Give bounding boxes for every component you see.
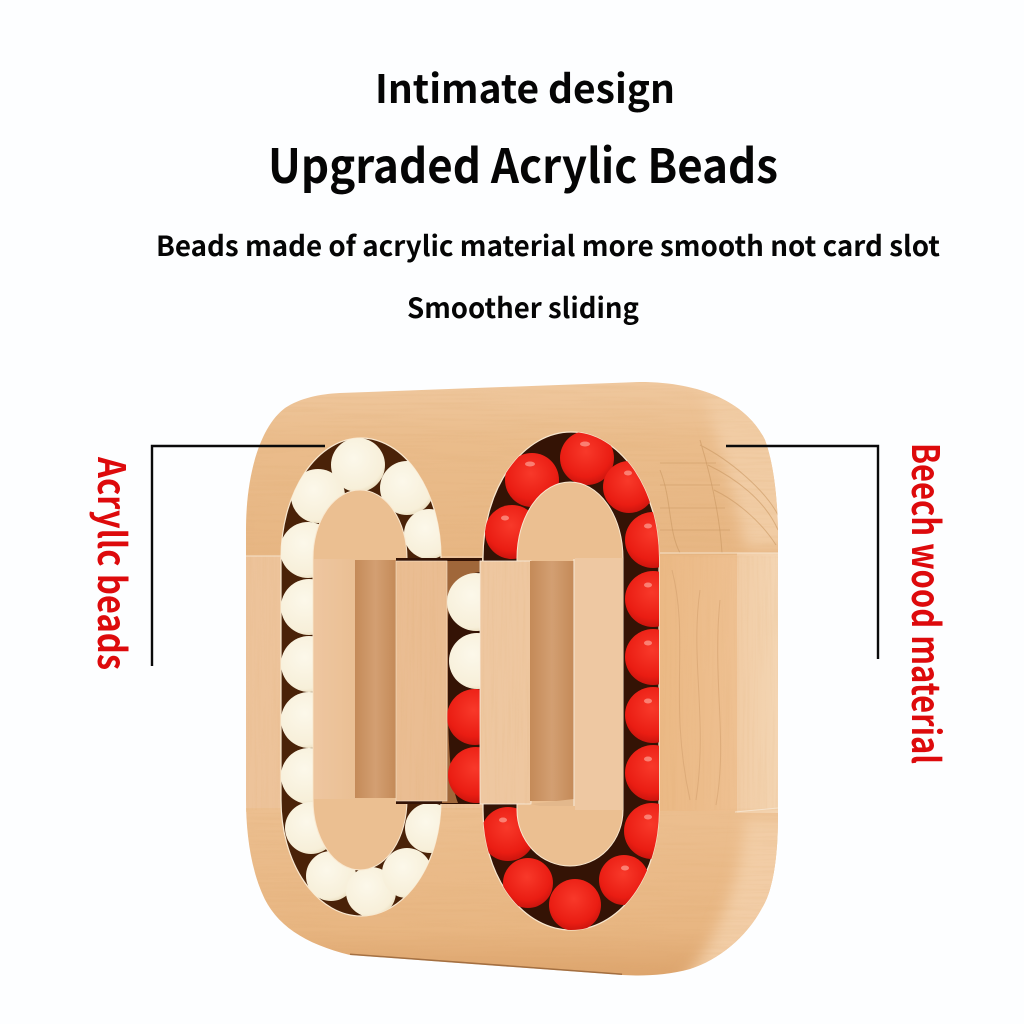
left bead track — [281, 438, 441, 916]
description line: Beads made of acrylic material more smooth not card slot — [156, 225, 940, 265]
title: Intimate design: Intimate design — [375, 59, 675, 115]
red beads — [484, 432, 659, 930]
right island — [517, 482, 623, 866]
label: Acrylic beads: Acryllc beads — [87, 456, 142, 670]
center channel with beads — [396, 558, 482, 804]
callout line: beech wood — [726, 446, 878, 659]
wooden puzzle product — [240, 378, 790, 985]
acrylic white beads — [280, 438, 455, 917]
infographic page — [90, 71, 943, 976]
sub-description: Smoother sliding: Smoother sliding — [407, 287, 639, 327]
heading: Upgraded Acrylic Beads: Upgraded Acrylic Beads — [268, 128, 778, 197]
right bead track — [483, 432, 659, 930]
left island — [313, 490, 407, 870]
wood body — [240, 378, 790, 985]
label: Beech wood material: Beech wood material — [901, 443, 956, 764]
sliding blocks — [314, 558, 623, 810]
callout line: acrylic beads — [152, 446, 325, 666]
